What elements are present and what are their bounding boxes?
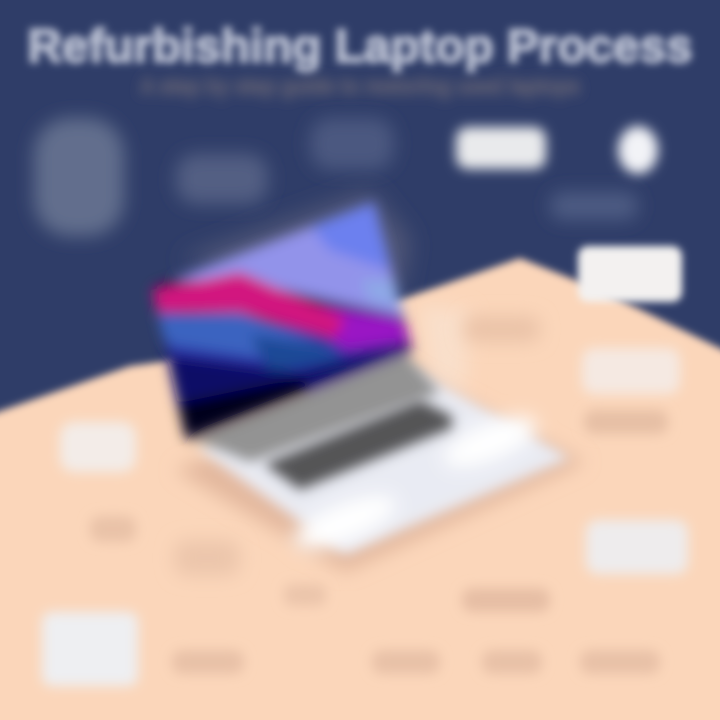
text block: left column xyxy=(34,118,124,236)
text block: centre top xyxy=(310,118,394,170)
laptop hinge band xyxy=(192,352,440,462)
background: screen haze xyxy=(180,190,410,290)
text block: desk top centre xyxy=(464,316,540,342)
desk highlight near laptop xyxy=(420,305,470,395)
icon: white circle xyxy=(618,126,658,174)
text block: lower centre right xyxy=(462,588,550,612)
text block: right middle xyxy=(584,410,668,434)
light box left xyxy=(60,422,136,472)
light box right upper xyxy=(582,348,680,394)
background: peach desk xyxy=(0,258,720,720)
laptop xyxy=(140,190,585,572)
laptop base highlight front xyxy=(287,485,403,559)
white label box right xyxy=(578,246,682,302)
bottom row text xyxy=(172,650,660,674)
screen dark navy xyxy=(162,332,412,426)
screen purple band xyxy=(280,300,410,350)
screen magenta band xyxy=(145,272,345,338)
text block: lower left xyxy=(90,516,136,542)
title: Refurbishing Laptop Process xyxy=(28,19,692,72)
text block: under circle xyxy=(550,192,638,220)
light box right lower xyxy=(586,520,688,574)
screen near black xyxy=(170,378,320,455)
screen blue band xyxy=(150,310,420,400)
laptop keyboard xyxy=(264,400,452,490)
screen top periwinkle xyxy=(161,219,412,330)
text block: lower centre left xyxy=(174,540,240,576)
text block: lower centre xyxy=(284,584,326,606)
screen base colour xyxy=(152,202,412,440)
text block: centre left xyxy=(176,154,268,204)
light box bottom left xyxy=(42,612,138,686)
laptop shadow xyxy=(175,372,585,572)
screen light blue right xyxy=(364,278,400,308)
laptop base xyxy=(198,366,570,554)
screen apex blue xyxy=(310,195,390,270)
white label box top xyxy=(456,127,546,169)
laptop screen xyxy=(140,190,420,455)
laptop base highlight right xyxy=(437,407,543,477)
subtitle: A step by step guide to restoring used laptops xyxy=(140,73,580,100)
